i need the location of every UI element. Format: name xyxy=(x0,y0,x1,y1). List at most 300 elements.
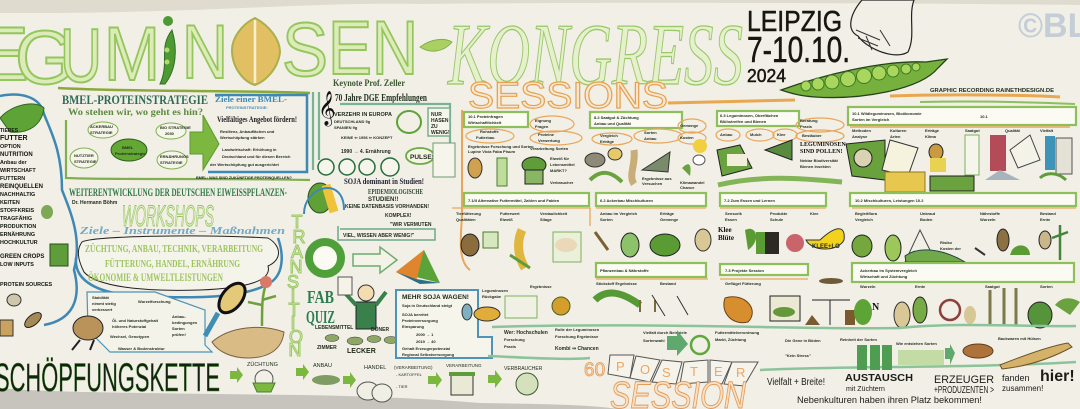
heading: BMEL Proteinstrategie: BMEL-PROTEINSTRATEGIE xyxy=(62,92,208,107)
icon: market stall xyxy=(449,374,475,395)
box outline xyxy=(338,226,435,240)
icon: soil clod with plant xyxy=(212,276,284,358)
text: band notes: Futtermittelverordnung xyxy=(715,330,760,335)
heading: goals: Ziele einer BMEL- xyxy=(215,94,287,104)
text box: findings: nimmt stetig xyxy=(92,301,116,306)
text: goals: Landwirtschaft: Erhöhung in xyxy=(222,147,277,152)
text: column lines: Anbau der xyxy=(0,160,28,166)
text: tasting labels xyxy=(315,325,389,355)
icon: consumer xyxy=(516,373,538,395)
session header: row 2 xyxy=(464,193,1076,206)
session header: row 3: Pflanzenbau & Nährstoffe xyxy=(600,268,649,273)
bubbles: row 1: Rohstoffe xyxy=(480,129,499,134)
text: band notes: "Kein Stress" xyxy=(785,353,811,358)
side label: Transition: S xyxy=(287,272,299,292)
panel: Mehr Soja wagen: 2019 → 40 xyxy=(416,339,436,344)
side label: Transition: T xyxy=(288,300,300,320)
text: column lines: GREEN CROPS xyxy=(0,254,44,260)
icon: carrot and pea character xyxy=(304,183,344,214)
illustrations: row 1: Lebensmittel xyxy=(550,162,575,167)
text: band notes: Backwaren mit Hülsen xyxy=(998,336,1041,341)
panel: Mehr Soja wagen xyxy=(396,290,492,358)
text: speaker: Dr. Hermann Böhm xyxy=(72,200,118,206)
text box: findings: höheres Potenzial xyxy=(112,324,146,329)
timeline circles xyxy=(318,158,399,176)
illustrations: row 1: Chance xyxy=(680,185,695,190)
illustrations: row 1: Bienen Insekten xyxy=(800,164,831,169)
text: soja: SOJA dominant in Studien! xyxy=(344,177,424,186)
session header: row 1: 10.1 Wildleguminosen, Bioökonomie xyxy=(852,111,922,116)
session header: row 1: Anbau und Qualität xyxy=(594,121,632,126)
text: column lines: NUTRITION xyxy=(0,152,33,158)
bubbles: row 1: Erträge xyxy=(925,128,940,133)
text box: findings: bedingungen xyxy=(172,320,198,325)
panel: poster band xyxy=(488,325,1076,370)
session header: row 2: 6.2 Ackerbau Mischkulturen xyxy=(600,198,654,203)
cloud: topics: ÖKONOMIE & UMWELTLEISTUNGEN xyxy=(88,270,223,284)
location and date: 2024 xyxy=(747,66,786,86)
text: goals: Wertschöpfung stärken xyxy=(220,135,265,140)
text: column lines: NACHHALTIG xyxy=(0,192,35,198)
title: Leguminosen: G xyxy=(15,16,74,101)
icon: chef xyxy=(338,277,386,329)
bubbles: row 1: Fragen xyxy=(535,124,549,129)
text: conclusions: KEINE DATENBASIS VORHANDEN! xyxy=(345,204,429,210)
cloud: topics xyxy=(76,236,282,297)
text: conclusions: VIEL, WISSEN ABER WENIG!" xyxy=(343,233,415,239)
bubbles: row 1: Praxis xyxy=(800,124,813,129)
note text: NUR xyxy=(431,112,442,118)
note text: WENIG! xyxy=(431,130,450,136)
text: column lines: ERNÄHRUNG xyxy=(0,231,35,238)
text: Ziele Instrumente Massnahmen: Ziele – Instrumente – Maßnahmen xyxy=(79,225,285,237)
text: goals: Vielfältiges Angebot fördern! xyxy=(217,114,297,124)
title: Leguminosen: N xyxy=(372,6,418,91)
heading: FAB quiz: FAB xyxy=(307,287,334,307)
icon: legume seed as letter O xyxy=(232,18,280,85)
heading: 70 years: 70 Jahre DGE Empfehlungen xyxy=(335,93,427,104)
text box: findings: Sorten xyxy=(172,326,185,331)
panel: left text column xyxy=(0,95,77,336)
pulses text: PULSES xyxy=(410,154,437,161)
text: band notes: Vielfalt durch Beispiele xyxy=(643,330,688,335)
text: epidemiologische Studien: EPIDEMIOLOGISCHE xyxy=(368,187,423,196)
panel: workshops: WORKSHOPS xyxy=(122,200,214,233)
text: keynote notes: 1990 → 4. Ernährung xyxy=(341,149,391,155)
illustrations: row 1: Nektar Biodiversität xyxy=(800,158,838,163)
text: band notes: Wie entstehen Sorten xyxy=(896,341,937,346)
illustrations: row 2 xyxy=(461,225,1068,268)
icon: sacks xyxy=(357,382,392,402)
text: goals xyxy=(210,105,297,167)
illustrations: row 1 xyxy=(468,135,1072,192)
closing notes: AUSTAUSCH xyxy=(845,373,913,384)
flag letters: O xyxy=(640,362,650,377)
bubbles: row 3: Wurzeln xyxy=(860,284,876,289)
value chain xyxy=(230,361,543,402)
text: goals: Resilienz, Anbauflächen und xyxy=(220,129,275,134)
closing notes: Vielfalt + Breite! xyxy=(767,377,825,388)
flags xyxy=(608,355,758,386)
text box: findings: Wechsel, Genotypen xyxy=(110,334,150,339)
flag letters: P xyxy=(616,359,625,374)
heading: 60: 60 xyxy=(584,360,605,381)
text: conclusions: KOMPLEX! xyxy=(385,213,412,219)
badge xyxy=(397,111,421,133)
session header: row 1: Sorten im Vergleich xyxy=(852,117,890,122)
bubbles: row 2: Sensorik xyxy=(725,211,743,216)
panel: Mehr Soja wagen: SOJA bereitet xyxy=(402,312,429,317)
text: goals: der Wertschöpfung gut ausgerichtet xyxy=(210,162,279,167)
session header: row 1: 10.1 Proteinfragen xyxy=(468,114,503,119)
text: band notes: Kombi ⇒ Chancen xyxy=(555,346,599,352)
text: band notes: Sortenwahl xyxy=(643,338,665,343)
bubbles: row 3: Geflügel Fütterung xyxy=(725,281,761,286)
icon: green columns xyxy=(857,345,892,370)
closing notes: +PRODUZENTEN > xyxy=(934,385,994,396)
bubbles: row 3: Stickstoff Ergebnisse xyxy=(596,281,638,286)
text: column lines: FUTTER xyxy=(0,135,28,142)
bubbles: row 3: Bestand xyxy=(660,281,676,286)
illustrations: row 2: Risiko xyxy=(940,240,953,245)
text: column lines: PROTEIN SOURCES xyxy=(0,282,53,288)
credit: GRAPHIC RECORDING RAINETHDESIGN.DE xyxy=(930,88,1054,94)
illustrations: row 3: Ergebnisse xyxy=(530,284,552,289)
panel: Mehr Soja wagen: Soja in Deutschland steigt xyxy=(402,303,453,308)
text: band notes: Forschung Ergebnisse xyxy=(555,334,599,339)
side label: Transition: N xyxy=(288,340,302,360)
text: column lines: PRODUKTION xyxy=(0,224,36,230)
bubbles: row 1: Verarbeitung Sorten xyxy=(530,146,569,151)
illustrations: row 1: MARKT? xyxy=(550,168,567,173)
text box: findings: verbessert xyxy=(92,307,113,312)
icon: treble clef: 𝄞 xyxy=(318,91,336,127)
plates xyxy=(325,334,398,345)
bubbles: row 1: Qualität xyxy=(1005,128,1021,133)
text: column lines: TIERES xyxy=(0,128,19,134)
session header: row 3: Ackerbau im Systemvergleich xyxy=(860,268,917,273)
illustrations: row 3: Leguminosen xyxy=(482,288,509,293)
location and date xyxy=(747,6,850,86)
bubbles: row 2: Gemenge xyxy=(660,217,679,222)
panel: Mehr Soja wagen: MEHR SOJA WAGEN! xyxy=(402,294,469,301)
bubbles: row 2: Eiweiß xyxy=(500,217,513,222)
diagram: strategy hub: ERNÄHRUNGS xyxy=(160,154,189,159)
pulses label xyxy=(406,148,434,164)
bubbles: row 1: Methoden xyxy=(852,128,871,133)
text: column lines: REINQUELLEN xyxy=(0,184,43,190)
session header: row 1: Wirtschaftlichkeit xyxy=(468,120,502,125)
session header: row 2: 10.2 Mischkulturen, Leistungen 10.2 xyxy=(855,198,924,203)
side label: Transition: T xyxy=(292,212,302,232)
bubbles: row 2: Unkraut xyxy=(920,211,936,216)
bubbles: row 2: Ernte xyxy=(1040,217,1051,222)
icon: ring diagram xyxy=(309,242,341,274)
bubbles: row 3 xyxy=(596,279,1053,289)
text: column lines: KEITEN xyxy=(0,200,20,206)
decorative rule xyxy=(668,95,1060,103)
diagram: strategy hub xyxy=(70,122,191,169)
caption: BMEL: WAS SIND ZUKÜNFTIGE PROTEINQUELLEN? xyxy=(196,175,292,180)
bubbles: row 2: Wurzeln xyxy=(980,217,996,222)
text: band notes: Rolle der Leguminosen xyxy=(555,327,600,332)
title: Leguminosen: M xyxy=(104,12,160,97)
diagram: strategy hub: BMEL xyxy=(122,145,134,150)
text: band notes: Wer: Hochschulen xyxy=(504,330,548,336)
icon: leaves xyxy=(0,104,44,132)
bubbles: row 1: Kulturen xyxy=(890,128,907,133)
text: band notes: Praxis xyxy=(504,344,517,349)
closing notes xyxy=(767,368,1075,405)
text box: findings: Stabilität xyxy=(92,295,110,300)
bubbles: row 2: Nährstoffe xyxy=(980,211,1001,216)
diagram: strategy hub: STRATEGIE xyxy=(160,160,183,165)
title: Leguminosen: U xyxy=(60,14,102,99)
bubbles: row 1: Saatgut xyxy=(965,128,980,133)
text box: findings: Öl- und Naturstoffgehalt xyxy=(112,318,159,323)
diagram: strategy hub: STRATEGIE xyxy=(90,130,113,135)
legend box xyxy=(433,143,455,177)
bubbles: row 2: Erträge xyxy=(660,211,675,216)
text: band notes xyxy=(504,327,1041,358)
title: Leguminosen xyxy=(0,6,418,101)
bubbles: row 1: Anbau xyxy=(720,132,733,137)
text: column lines xyxy=(0,128,53,288)
text box: findings: Wurzelforschung xyxy=(138,299,171,304)
side label: Transition xyxy=(287,212,306,360)
note xyxy=(428,108,450,136)
session header: row 3: 7.3 Projekte Session xyxy=(725,268,764,273)
session header: row 2: 7.2 Zum Essen und Lernen xyxy=(724,198,775,203)
panel: keynote xyxy=(304,78,492,358)
bubbles: row 2: Tierfütterung xyxy=(456,211,481,216)
bubbles: row 3: Sorten xyxy=(1040,284,1053,289)
text: column lines: FUTTERN xyxy=(0,176,25,182)
bubbles: row 2: Schule xyxy=(770,217,784,222)
illustrations: row 3 xyxy=(474,278,1080,328)
session header: row 2: 7.1/II Alternative Futtermittel, Zahlen und Fakten xyxy=(468,198,560,203)
bubbles: row 2: Begleitflora xyxy=(855,211,878,216)
bubbles: row 1: Eignung xyxy=(535,118,552,123)
illustrations: row 1: Eiweiß für xyxy=(550,156,570,161)
diagram: strategy hub: NUTZTIER xyxy=(74,153,94,158)
panel: Mehr Soja wagen: Einsparung xyxy=(402,324,425,329)
panel: Mehr Soja wagen: 2000 → 1 xyxy=(416,332,434,337)
text: keynote notes xyxy=(334,112,393,155)
closing notes: hier! xyxy=(1040,368,1075,385)
bubbles: row 1: Beratung xyxy=(800,118,818,123)
text: tasting labels: LEBENSMITTEL xyxy=(315,325,353,331)
icons: small seed and beetle xyxy=(0,205,68,336)
text box: findings: Wasser & Bodenstruktur xyxy=(118,346,165,351)
chain labels: VERBRAUCHER xyxy=(504,366,543,372)
text: column lines: WIRTSCHAFT xyxy=(0,168,36,174)
text box: findings: Anbau- xyxy=(172,314,186,319)
bubbles: row 1: Sorten xyxy=(644,130,657,135)
bottom title: Schöpfungskette: SCHÖPFUNGSKETTE xyxy=(0,356,220,400)
text: band notes: Reinheit der Sorten xyxy=(840,337,877,342)
chain labels xyxy=(247,361,543,389)
icon: magnifying glass xyxy=(205,278,250,336)
flag letters: E xyxy=(714,364,723,379)
text: tasting labels: LECKER xyxy=(347,348,376,355)
bubbles: row 3: Saatgut xyxy=(985,284,1000,289)
heading: Weiterentwicklung: WEITERENTWICKLUNG DER DEUTSCHEN EIWEISSPFLANZEN- xyxy=(69,185,287,199)
session header: row 1: Blühstreifen und Bienen xyxy=(720,119,767,124)
panel: Mehr Soja wagen: Gehalt Erzeugerpotenzial xyxy=(402,346,450,351)
chain labels: (VERARBEITUNG) xyxy=(394,365,433,370)
bubbles: row 2: Klee xyxy=(810,211,819,216)
chain labels: ANBAU xyxy=(313,363,332,369)
sessions heading: SESSIONS xyxy=(468,75,668,116)
bubbles: row 1: Proteine xyxy=(538,132,555,137)
icon: field xyxy=(312,375,340,385)
chain labels: - KARTOFFEL xyxy=(396,372,423,377)
bubbles: row 1: Kosten xyxy=(680,135,694,140)
subheading: Wo stehen wir, wo geht es hin? xyxy=(68,107,203,117)
text: column lines: STOFFKREIS xyxy=(0,208,34,214)
illustrations: row 1: Versuchen xyxy=(642,181,663,186)
chain labels: ZÜCHTUNG xyxy=(247,361,278,368)
icon: seedling basket xyxy=(253,370,275,392)
location and date: 7-10.10. xyxy=(747,29,850,70)
session header: row 1: 8.2 Saatgut & Züchtung xyxy=(594,115,639,120)
icon: pea pod letter i xyxy=(160,16,175,84)
illustrations: row 2: Kosten der xyxy=(940,246,961,251)
text: tasting labels: DÖNER xyxy=(371,326,389,333)
title: Kongress xyxy=(420,7,743,104)
illustrations: row 2: Klee xyxy=(718,226,732,234)
flag letters: T xyxy=(690,364,698,379)
bubbles: row 1: Anbau xyxy=(644,136,657,141)
diagram: strategy hub: 2030 xyxy=(165,131,175,136)
bubbles: row 1 xyxy=(466,116,1070,154)
bubbles: row 1: Klee xyxy=(777,132,786,137)
diagram: strategy hub: ACKERBAU xyxy=(90,124,113,129)
text: studien: STUDIEN!! xyxy=(368,197,398,203)
flag letters: S xyxy=(662,365,671,380)
text: keynote notes: KEINE ⇦ 1956 ⇦ KONZEPT xyxy=(341,135,393,140)
bubbles: row 1: Lupine Vicia Faba Pisum xyxy=(468,149,515,154)
bubbles: row 2: Anbau im Vergleich xyxy=(600,211,638,216)
text: tasting labels: ZIMMER xyxy=(317,345,337,351)
icon: pyramid xyxy=(396,250,440,284)
text: goals: Deutschland und für diesen Bereich xyxy=(222,154,291,159)
text: keynote notes: SPANIEN 9g xyxy=(334,125,358,130)
flag letters xyxy=(616,359,745,380)
diagram: strategy hub: BIO STRATEGIE xyxy=(160,125,191,130)
chain arrows xyxy=(230,364,502,388)
text: column lines: HOCHKULTUR xyxy=(0,240,38,246)
bubbles: row 1: Ergebnisse Forschung und Sorten xyxy=(468,144,534,149)
panel: BMEL protein strategy xyxy=(58,88,310,180)
note text: HASEN xyxy=(431,118,449,124)
bubbles: row 2: Qualitäten xyxy=(456,217,476,222)
illustrations: row 1: SIND POLLEN! xyxy=(800,149,843,155)
illustrations: row 2: KLEE+LO xyxy=(812,244,840,250)
bubbles: row 1: Gemenge xyxy=(680,123,699,128)
session header: row 3 xyxy=(596,263,1074,282)
side label: Transition: N xyxy=(290,257,302,277)
title: Kongress: KONGRESS xyxy=(447,7,743,104)
side label: Transition: O xyxy=(289,327,303,347)
bubbles: row 1: Vielfalt xyxy=(1040,128,1054,133)
bubbles: row 1: Klima xyxy=(925,134,937,139)
closing notes: mit Züchtern xyxy=(846,386,885,393)
bubbles: row 3: Ernte xyxy=(915,284,926,289)
text: column lines: OPTION xyxy=(0,144,21,150)
bubbles: row 1: Futterbau xyxy=(476,135,495,140)
illustrations: row 2: Blüte xyxy=(718,234,734,242)
title: Leguminosen: N xyxy=(182,10,228,95)
chain labels: - TIER xyxy=(396,384,408,389)
icon: plant strip xyxy=(898,350,944,365)
closing notes: Nebenkulturen haben ihren Platz bekommen! xyxy=(797,395,982,405)
text: band notes: Forschung xyxy=(504,337,525,342)
text: goals: PROTEINSTRATEGIE: xyxy=(226,105,268,110)
bubbles: row 1: Erträge xyxy=(600,139,615,144)
bubbles: row 2: Bestand xyxy=(1040,211,1056,216)
text: keynote notes: VERZEHR IN EUROPA xyxy=(334,112,392,118)
text: conclusions xyxy=(343,204,432,239)
session header: row 1: 10.1 xyxy=(980,114,989,119)
session header: row 1: 6.3 Leguminosen, Oberflächen xyxy=(720,113,779,118)
illustrations: row 1: LEGUMINOSEN xyxy=(800,142,846,148)
panel: Mehr Soja wagen: Proteinversorgung xyxy=(402,318,438,323)
chain labels: HANDEL xyxy=(364,365,386,371)
icon: bean character xyxy=(72,316,103,350)
panel: workshops xyxy=(69,185,287,358)
bubbles: row 1: Analyse xyxy=(852,134,868,139)
side label: Transition: I xyxy=(290,313,296,333)
icon: green arrow with DC xyxy=(667,330,709,356)
bubbles: row 2: Futterwert xyxy=(500,211,520,216)
bubbles: row 2: Produkte xyxy=(770,211,788,216)
side label: Transition: I xyxy=(290,286,296,306)
illustrations: row 1: Klimawandel xyxy=(680,180,704,185)
title: Leguminosen: S xyxy=(282,8,328,93)
bubbles: row 1: Arten xyxy=(890,134,901,139)
bubbles: row 2: Vergleich xyxy=(855,217,873,222)
diagram: strategy hub: Proteinstrategie xyxy=(115,151,146,156)
text box: findings xyxy=(87,292,212,352)
illustrations: row 1: Ergebnisse aus xyxy=(642,176,672,181)
arrow: Wirkungsweg xyxy=(353,247,397,273)
side label: Transition: R xyxy=(292,227,306,247)
flag letters: R xyxy=(736,365,745,380)
text: band notes: Die Gene in Böden xyxy=(785,338,821,343)
closing notes: ERZEUGER xyxy=(934,374,994,386)
bubbles: row 2: Essen xyxy=(725,217,737,222)
panel: Mehr Soja wagen: Regional Selbstversorgung xyxy=(402,352,455,357)
bubbles: row 2: Sorten xyxy=(600,217,613,222)
heading: quiz: QUIZ xyxy=(306,307,335,327)
bubbles: row 1: Verwertung xyxy=(538,138,560,143)
illustrations: row 3: N xyxy=(872,302,880,313)
diagram: strategy hub: STRATEGIE xyxy=(74,159,97,164)
panel: sessions xyxy=(452,107,1080,328)
text: column lines: LOW INPUTS xyxy=(0,262,34,268)
bubbles: row 1: Bestäuber xyxy=(802,133,822,138)
illustrations: row 3: Rückgabe xyxy=(482,294,502,299)
cloud: topics: FÜTTERUNG, HANDEL, ERNÄHRUNG xyxy=(105,257,240,270)
note text xyxy=(431,112,450,136)
session header: row 1 xyxy=(464,107,1076,128)
note text: ZU xyxy=(431,124,438,130)
icon: bread xyxy=(963,344,993,358)
illustrations: row 1: Verbraucher xyxy=(550,180,574,185)
title: Leguminosen: E xyxy=(328,6,372,91)
